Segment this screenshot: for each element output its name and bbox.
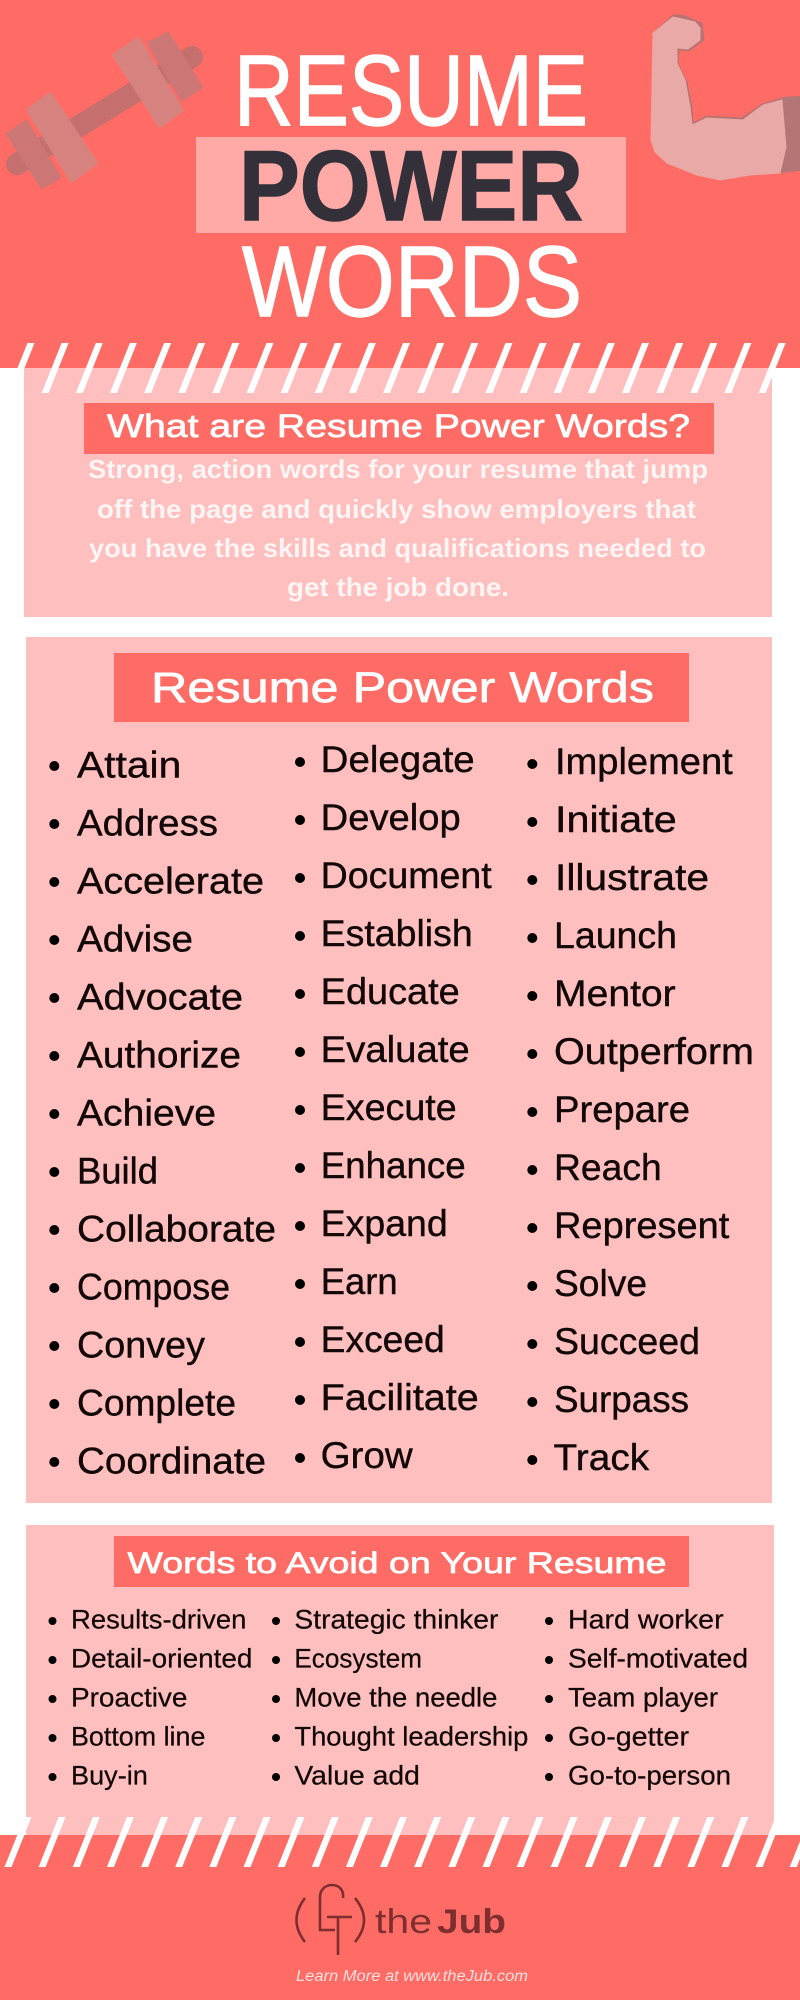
avoid list column 1: [48, 1604, 252, 1790]
avoid list column 2: [272, 1604, 528, 1790]
word list column 3: Solve: [554, 1263, 647, 1304]
word list column 1: Compose: [77, 1266, 230, 1307]
word list column 2: Develop: [321, 797, 461, 838]
heading: resume power words: [114, 653, 689, 722]
definition text: off the page and quickly show employers that: [97, 494, 696, 524]
avoid list column 3: Hard worker: [568, 1604, 724, 1634]
word list column 1: Authorize: [77, 1034, 241, 1075]
avoid list column 3: Team player: [568, 1682, 718, 1712]
word list column 2: Educate: [321, 971, 460, 1012]
word list column 1: Address: [77, 802, 218, 843]
heading: resume power words: Resume Power Words: [151, 664, 654, 712]
avoid list column 3: [545, 1604, 748, 1790]
logo: theJub: [296, 1885, 506, 1955]
word list column 1: [49, 744, 276, 1481]
panel: resume power words: [26, 637, 772, 1503]
definition text: Strong, action words for your resume that jump: [88, 454, 708, 484]
word list column 3: Succeed: [554, 1321, 700, 1362]
word list column 1: Collaborate: [77, 1208, 276, 1249]
word list column 3: Implement: [555, 741, 733, 782]
word list column 1: Build: [77, 1150, 158, 1191]
heading: words to avoid: [114, 1536, 689, 1587]
word list column 3: Launch: [554, 915, 677, 956]
word list column 1: Accelerate: [77, 860, 264, 901]
word list column 3: Prepare: [554, 1089, 690, 1130]
footer band: [0, 1835, 800, 2000]
word list column 3: Outperform: [554, 1031, 754, 1072]
word list column 3: Initiate: [555, 799, 677, 840]
logo: theJub: the: [375, 1903, 432, 1941]
word list column 2: Execute: [321, 1087, 457, 1128]
heading: what are resume power words: What are Resume Power Words?: [107, 408, 690, 444]
icon: flexed arm: [651, 15, 800, 180]
word list column 2: Establish: [321, 913, 473, 954]
definition text: [88, 454, 708, 602]
header band: [0, 0, 800, 368]
word list column 3: Mentor: [554, 973, 676, 1014]
word list column 1: Coordinate: [77, 1440, 266, 1481]
heading: words to avoid: Words to Avoid on Your Resume: [128, 1547, 666, 1580]
definition text: you have the skills and qualifications needed to: [89, 533, 706, 563]
word list column 3: Illustrate: [555, 857, 709, 898]
title: WORDS: WORDS: [242, 226, 582, 338]
avoid list column 3: Self-motivated: [568, 1644, 748, 1674]
word list column 3: Represent: [554, 1205, 730, 1246]
logo: theJub: Jub: [437, 1903, 506, 1941]
avoid list column 2: Value add: [294, 1760, 420, 1790]
avoid list column 1: Bottom line: [71, 1722, 205, 1752]
avoid list column 2: Strategic thinker: [294, 1604, 499, 1634]
word list column 2: Earn: [321, 1261, 398, 1302]
avoid list column 1: Detail-oriented: [71, 1644, 252, 1674]
avoid list column 2: Move the needle: [294, 1682, 497, 1712]
avoid list column 2: Ecosystem: [294, 1644, 422, 1674]
panel: words to avoid: [26, 1525, 774, 1837]
avoid list column 1: Results-driven: [71, 1604, 246, 1634]
word list column 2: Document: [321, 855, 492, 896]
avoid list column 1: Buy-in: [71, 1760, 148, 1790]
avoid list column 1: Proactive: [71, 1682, 187, 1712]
word list column 2: Delegate: [321, 739, 475, 780]
top and bottom stripe bands: [4, 343, 800, 1867]
word list column 1: Advise: [77, 918, 193, 959]
definition text: get the job done.: [287, 572, 509, 602]
word list column 3: Surpass: [554, 1379, 689, 1420]
word list column 1: Advocate: [77, 976, 243, 1017]
word list column 1: Attain: [77, 744, 181, 785]
title box: POWER: POWER: [239, 130, 583, 241]
title: RESUME: RESUME: [234, 35, 588, 147]
word list column 3: [527, 741, 754, 1478]
word list column 2: [295, 739, 492, 1476]
word list column 2: Facilitate: [321, 1377, 479, 1418]
word list column 2: Exceed: [321, 1319, 445, 1360]
word list column 2: Expand: [321, 1203, 448, 1244]
word list column 2: Enhance: [321, 1145, 466, 1186]
word list column 3: Reach: [554, 1147, 662, 1188]
word list column 2: Grow: [321, 1435, 413, 1476]
icon: dumbbell: [8, 34, 201, 187]
footer link text: Learn More at www.theJub.com: [296, 1968, 528, 1985]
word list column 1: Achieve: [77, 1092, 216, 1133]
word list column 2: Evaluate: [321, 1029, 470, 1070]
word list column 3: Track: [554, 1437, 650, 1478]
word list column 1: Complete: [77, 1382, 236, 1423]
word list column 1: Convey: [77, 1324, 206, 1365]
avoid list column 3: Go-getter: [568, 1722, 689, 1752]
heading: what are resume power words: [84, 403, 714, 454]
avoid list column 2: Thought leadership: [294, 1722, 528, 1752]
panel: what are resume power words: [24, 368, 772, 617]
avoid list column 3: Go-to-person: [568, 1760, 731, 1790]
